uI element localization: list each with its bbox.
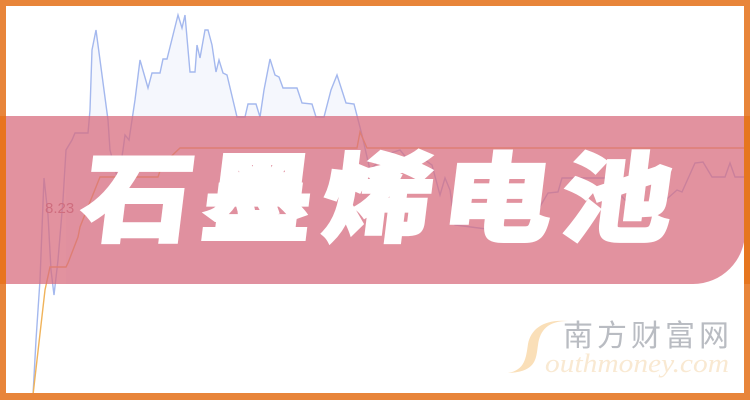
axis value label: 8.23 — [45, 200, 74, 217]
right frame darker segment — [744, 116, 750, 284]
pink title band — [6, 116, 745, 284]
orange average line — [33, 132, 745, 395]
watermark swoosh S — [508, 321, 568, 373]
chart area fill — [66, 15, 370, 284]
watermark domain: outhmoney.com — [545, 349, 729, 378]
watermark Chinese name: 南方财富网 — [563, 320, 729, 353]
title: 石墨烯电池 — [77, 147, 690, 254]
left frame darker segment — [0, 116, 6, 284]
